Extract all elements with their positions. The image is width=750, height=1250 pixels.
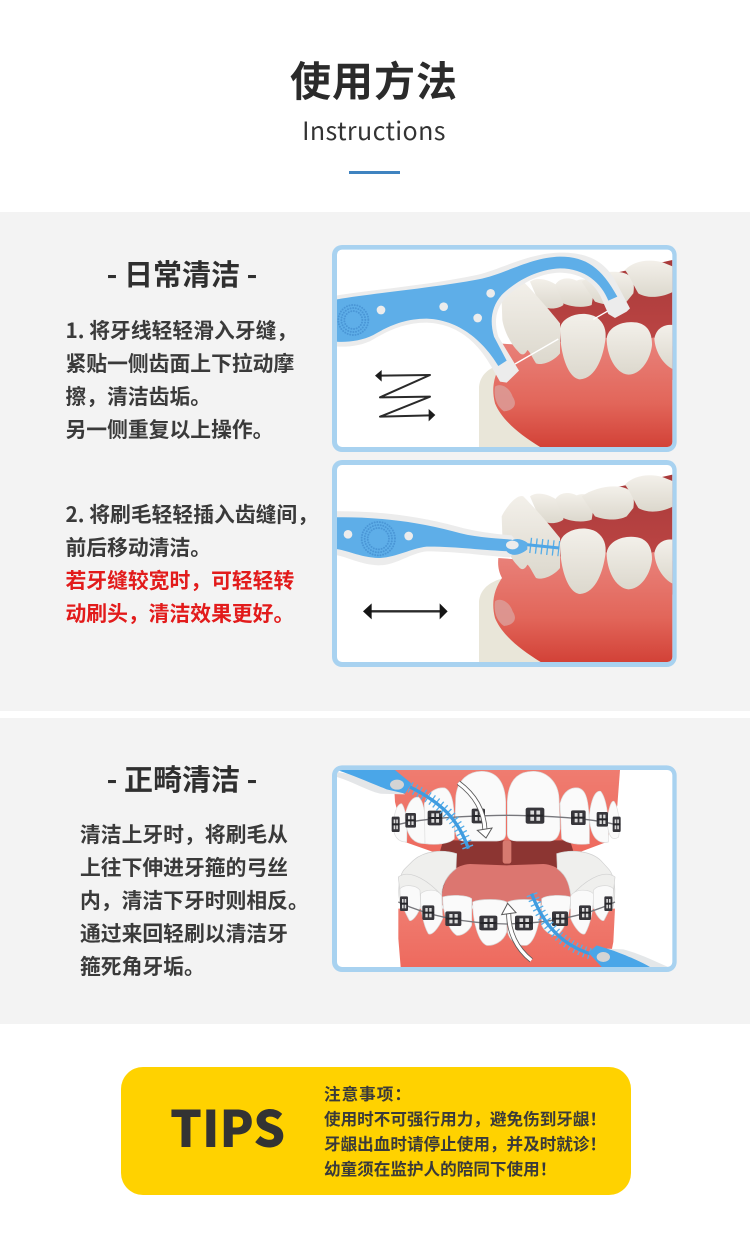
callout: tips [121, 1067, 631, 1195]
text block: orthodontic instructions: 通过来回轻刷以清洁牙 [80, 916, 288, 946]
panel frame [332, 245, 677, 452]
panel inner [337, 465, 672, 662]
brush: upper left [337, 770, 468, 849]
arrow: brush upward [502, 903, 531, 960]
tips text: 幼童须在监护人的陪同下使用！ [324, 1156, 556, 1180]
text block: step 1: 另一侧重复以上操作。 [66, 412, 273, 442]
tips label: TIPS [170, 1090, 285, 1162]
illustration: brushing braces [332, 765, 677, 972]
illustration: interdental brush on teeth [332, 460, 677, 667]
text block: step 2: 若牙缝较宽时，可轻轻转 [66, 564, 294, 594]
heading: orthodontic cleaning: - 正畸清洁 - [107, 757, 257, 799]
panel frame [332, 460, 677, 667]
floss pick [333, 253, 630, 383]
illustration: floss pick on teeth [332, 245, 677, 452]
arrow: back and forth motion [363, 603, 448, 619]
text block: step 1 [66, 314, 297, 442]
text block: orthodontic instructions: 清洁上牙时，将刷毛从 [80, 818, 288, 848]
tips text [324, 1081, 606, 1180]
tips text: 使用时不可强行用力，避免伤到牙龈！ [324, 1106, 606, 1130]
jaw model [479, 260, 673, 457]
arrow: zigzag motion [375, 370, 435, 421]
interdental brush [333, 511, 559, 565]
title accent line [349, 171, 400, 174]
lower teeth [400, 886, 613, 945]
text block: step 1: 擦，清洁齿垢。 [66, 380, 211, 410]
text block: step 2 [66, 498, 318, 626]
text block: orthodontic instructions: 内，清洁下牙时则相反。 [80, 884, 309, 914]
text block: step 2: 前后移动清洁。 [66, 530, 211, 560]
heading: daily cleaning: - 日常清洁 - [107, 252, 257, 294]
lower back teeth [398, 851, 615, 909]
panel: orthodontic cleaning background [0, 718, 750, 1024]
text block: step 2: 动刷头，清洁效果更好。 [66, 596, 294, 626]
arrow: brush downward [458, 783, 492, 838]
brush: lower right [532, 894, 668, 967]
text block: orthodontic instructions: 箍死角牙垢。 [80, 950, 205, 980]
text block: orthodontic instructions: 上往下伸进牙箍的弓丝 [80, 850, 288, 880]
panel frame [332, 765, 677, 972]
panel inner [337, 250, 672, 447]
upper teeth [393, 771, 619, 844]
title: 使用方法 [290, 48, 458, 108]
panel inner [337, 770, 672, 967]
text block: step 1: 1. 将牙线轻轻滑入牙缝， [66, 314, 297, 344]
jaw model [479, 475, 673, 671]
panel: daily cleaning background [0, 212, 750, 711]
text block: step 2: 2. 将刷毛轻轻插入齿缝间， [66, 498, 318, 528]
tips text: 牙龈出血时请停止使用，并及时就诊！ [324, 1131, 606, 1155]
teeth and gums [392, 770, 621, 967]
text block: orthodontic instructions [80, 818, 309, 980]
text block: step 1: 紧贴一侧齿面上下拉动摩 [66, 346, 294, 376]
wires and brackets [395, 815, 618, 825]
subtitle: Instructions [302, 112, 446, 148]
tips text: 注意事项： [324, 1081, 412, 1105]
